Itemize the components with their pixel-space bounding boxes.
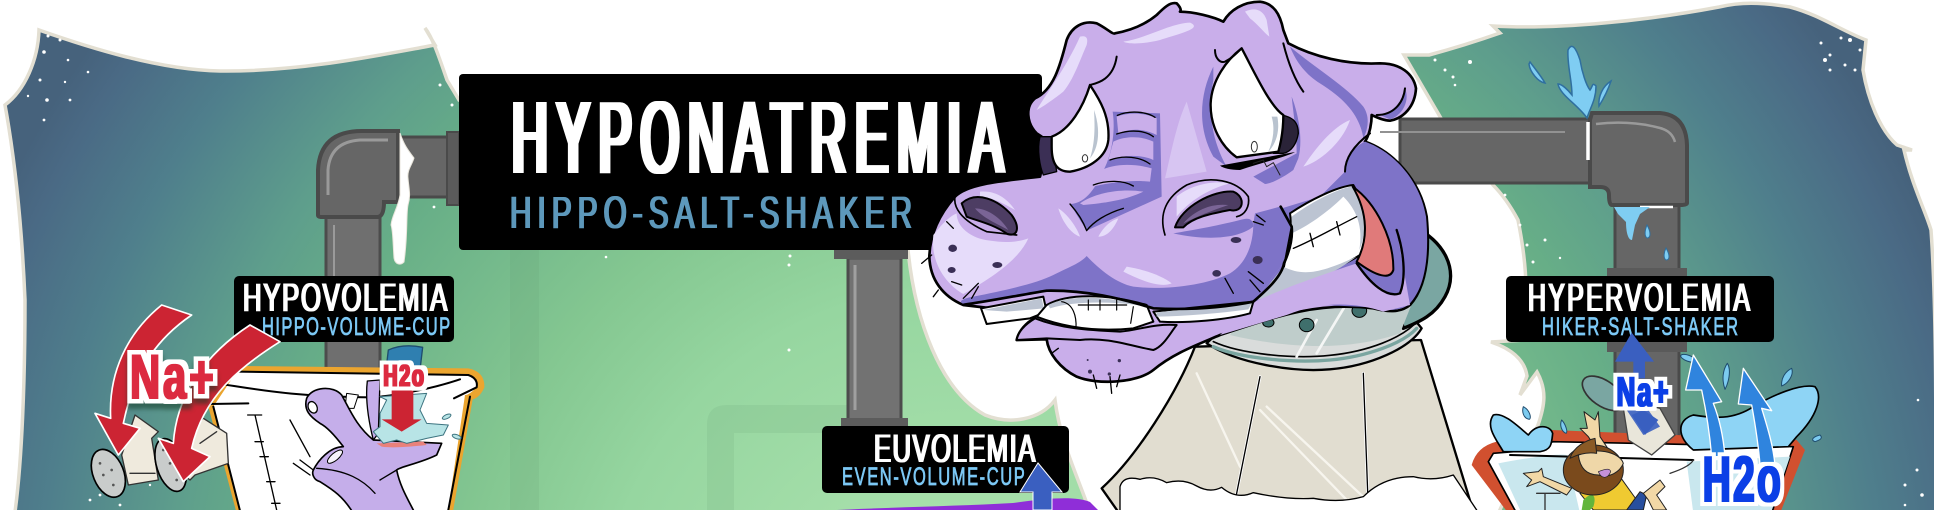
- shaker lid: [1207, 227, 1451, 370]
- label: hypervolemia: HIKER-SALT-SHAKER: [1542, 314, 1738, 341]
- splash left: [1490, 415, 1553, 452]
- icon: blue tap: [386, 346, 423, 370]
- highlights: [933, 9, 1350, 294]
- icon: measuring cup: [208, 366, 484, 510]
- arrow: salt up: [1615, 333, 1654, 378]
- side teeth and gum: [1220, 185, 1410, 335]
- label: hypervolemia: HYPERVOLEMIA: [1528, 276, 1751, 321]
- pipe: centre: [834, 250, 908, 427]
- arrow: euvolemia up: [1020, 463, 1062, 510]
- water drips below elbow: [1614, 207, 1650, 240]
- label: hypovolemia: HYPOVOLEMIA: [243, 276, 448, 321]
- icon: salt shaker upside down: [1576, 369, 1675, 455]
- salt drip: [391, 133, 414, 264]
- wrinkles and whiskers: [922, 43, 1405, 393]
- pipe: left elbow leaking salt: [318, 131, 459, 372]
- label: hypovolemia: [234, 276, 454, 342]
- label: H2o: H2o: [383, 360, 424, 393]
- shaker holes: [1263, 304, 1367, 332]
- arrow: water up, left: [1686, 355, 1725, 457]
- label: hypovolemia: HIPPO-VOLUME-CUP: [262, 314, 450, 341]
- icon: purple cup rim: [837, 498, 1100, 510]
- icon: salt shakers: [85, 415, 228, 502]
- subtitle: HIPPO-SALT-SHAKER: [510, 188, 912, 239]
- pipe: right elbow leaking water: [1380, 46, 1687, 440]
- label: euvolemia: EUVOLEMIA: [874, 427, 1036, 472]
- icon: hiker: [1523, 412, 1667, 510]
- salt: [1120, 475, 1483, 510]
- shaker glass body: [1102, 340, 1483, 510]
- label: hypervolemia: [1506, 276, 1774, 342]
- muzzle outline: [964, 207, 1292, 309]
- label: Na+: Na+: [130, 342, 214, 412]
- right eye: [1211, 48, 1298, 175]
- title: HYPONATREMIA: [512, 81, 1003, 196]
- icon: hippo head on salt shaker: [922, 2, 1483, 510]
- left eye: [1039, 85, 1109, 175]
- icon: small hippo in cup: [306, 380, 442, 510]
- panel: hypervolemia cup illustration: [1472, 333, 1821, 510]
- nostrils: [955, 180, 1249, 235]
- splash right: [1681, 386, 1819, 450]
- panel: left background: [5, 28, 1090, 510]
- arrow: salt leaving, left: [95, 305, 192, 455]
- water leak at top: [1558, 46, 1596, 118]
- panel: right background: [1404, 3, 1934, 510]
- title box: [459, 74, 1042, 250]
- arrow: water up, right: [1738, 368, 1775, 465]
- faint ghost pipe in background: [510, 250, 848, 510]
- arrow: water entering: [382, 390, 422, 432]
- head shading: [961, 47, 1427, 310]
- nose bridge light bands: [1080, 114, 1157, 205]
- icon: overflowing cup: [1472, 353, 1821, 510]
- droplets: [1523, 353, 1821, 442]
- front teeth: [981, 296, 1253, 330]
- head silhouette: [929, 2, 1428, 382]
- label: euvolemia: EVEN-VOLUME-CUP: [842, 464, 1025, 491]
- arrow: salt leaving, right: [158, 325, 280, 482]
- lower lip: [1017, 318, 1177, 350]
- arrow tail: salt: [1627, 410, 1660, 435]
- water splash: [373, 393, 448, 443]
- label: euvolemia: [822, 426, 1069, 493]
- label: Na+: Na+: [1617, 370, 1668, 416]
- panel: hypovolemia cup illustration: [85, 305, 484, 510]
